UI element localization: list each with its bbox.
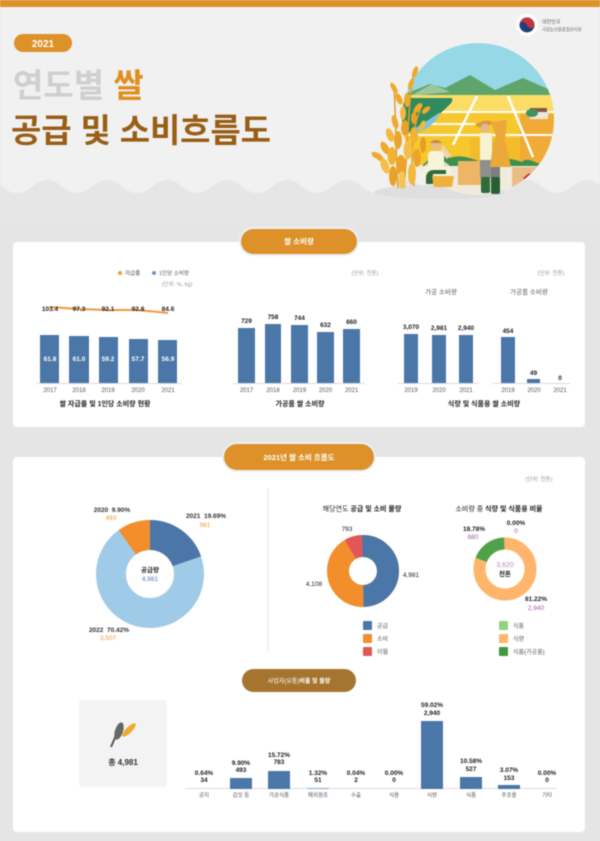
chart: processed food consumption: 729 — [241, 318, 252, 325]
legend: 식품 — [513, 622, 525, 630]
bar chart: use breakdown: 0.00% — [538, 770, 556, 777]
donut: supply by year: 981 — [200, 522, 211, 529]
chart: self-sufficiency and per-capita consumption: 2018 — [72, 388, 86, 394]
legend: 소비 — [377, 635, 388, 643]
donut: supply and consumption: 4,981 — [403, 572, 420, 579]
bar chart: use breakdown: 34 — [200, 777, 208, 784]
bar chart: use breakdown: 0.00% — [385, 770, 403, 777]
legend: (단위: %, kg) — [162, 280, 192, 288]
heading pill: rice consumption — [239, 227, 359, 256]
donut: supply and consumption — [306, 504, 420, 656]
chart: self-sufficiency and per-capita consumption — [36, 269, 192, 408]
chart: self-sufficiency and per-capita consumption: 쌀 자급률 및 1인당 소비량 현황 — [60, 399, 151, 408]
heading pill: 2021 flow: 2021년 쌀 소비 흐름도 — [263, 452, 335, 462]
legend — [363, 621, 389, 656]
chart: food and processed consumption: 454 — [503, 328, 514, 335]
bar chart: use breakdown: 0.64% — [195, 770, 213, 777]
chart: self-sufficiency and per-capita consumption: 92.1 — [102, 306, 115, 313]
heading pill: rice consumption: 쌀 소비량 — [284, 236, 314, 246]
chart: self-sufficiency and per-capita consumption: 56.9 — [162, 356, 175, 363]
title: 공급 및 소비흐름도 — [11, 112, 271, 149]
legend — [118, 269, 192, 288]
chart: self-sufficiency and per-capita consumption: 2019 — [101, 388, 115, 394]
card: total icon: 총 4,981 — [108, 757, 138, 767]
chart: self-sufficiency and per-capita consumption: 84.6 — [162, 306, 175, 313]
bar chart: use breakdown: 783 — [274, 759, 285, 766]
chart: processed food consumption: 744 — [294, 315, 305, 322]
donut: supply by year: 2022 70.42% — [89, 627, 129, 634]
bar chart: use breakdown: 가공식품 — [269, 791, 289, 799]
bar chart: use breakdown: 9.90% — [232, 760, 250, 767]
chart: processed food consumption: 2018 — [266, 388, 280, 394]
donut: food and processed share: 0 — [514, 528, 518, 535]
donut: supply and consumption: 4,108 — [306, 581, 323, 588]
donut: food and processed share: 0.00% — [507, 520, 525, 527]
panel: rice consumption — [13, 227, 585, 427]
card: total icon — [79, 700, 167, 787]
year badge — [14, 34, 72, 52]
bar chart: use breakdown: 주조용 — [501, 792, 517, 799]
bar chart: use breakdown: 해외원조 — [308, 791, 328, 799]
title — [11, 67, 271, 149]
bar chart: use breakdown: 공지 — [199, 791, 209, 799]
chart: food and processed consumption: 가공품 소비량 — [510, 287, 548, 296]
chart: processed food consumption: 2019 — [293, 388, 307, 394]
chart: food and processed consumption: 49 — [530, 370, 537, 377]
title: 연도별 쌀 — [13, 67, 144, 104]
chart: processed food consumption: 2020 — [319, 388, 333, 394]
logo: 대한민국 — [542, 18, 561, 26]
panel: 2021 rice flow — [13, 442, 585, 832]
bar chart: use breakdown: 수출 — [351, 791, 361, 799]
chart: self-sufficiency and per-capita consumption: 2021 — [161, 388, 175, 394]
legend — [499, 621, 545, 656]
legend: 공급 — [377, 623, 389, 630]
legend: 이월 — [377, 648, 388, 656]
bar chart: use breakdown — [185, 702, 557, 799]
bar chart: use breakdown: 감모 등 — [233, 792, 249, 799]
donut: food and processed share: 천톤 — [499, 569, 511, 578]
donut: food and processed share — [455, 504, 547, 656]
year badge: 2021 — [32, 39, 55, 50]
chart: food and processed consumption: 2020 — [432, 388, 446, 394]
rice stalks — [370, 66, 431, 189]
illustration: rice harvest — [370, 40, 560, 199]
chart: food and processed consumption: 2021 — [459, 388, 473, 394]
legend: 식품(가공품) — [513, 648, 545, 656]
donut: supply by year: 공급량 — [141, 565, 159, 574]
legend: 자급률 — [125, 269, 140, 277]
donut: supply by year: 2021 19.69% — [186, 513, 226, 520]
panel: 2021 rice flow: (단위: 천톤) — [526, 475, 553, 483]
donut: food and processed share: 18.78% — [463, 526, 485, 533]
chart: food and processed consumption: 2019 — [404, 388, 418, 394]
legend: 식량 — [513, 635, 525, 643]
chart: self-sufficiency and per-capita consumption: 61.8 — [44, 356, 57, 363]
bar chart: use breakdown: 1.32% — [309, 770, 327, 777]
bar chart: use breakdown: 0.04% — [347, 770, 365, 777]
donut: supply by year: 3,507 — [100, 635, 117, 642]
bar chart: use breakdown: 2,940 — [424, 710, 441, 717]
heading pill: 2021 flow — [222, 442, 376, 472]
header background — [0, 0, 600, 225]
chart: processed food consumption — [233, 269, 379, 408]
bar chart: use breakdown: 식품 — [466, 791, 476, 799]
bar chart: use breakdown: 527 — [466, 766, 477, 773]
chart: self-sufficiency and per-capita consumption: 103.4 — [42, 306, 59, 313]
bar chart: use breakdown: 0 — [545, 777, 549, 784]
chart: self-sufficiency and per-capita consumption: 92.8 — [132, 306, 145, 313]
chart: self-sufficiency and per-capita consumption: 2020 — [131, 388, 145, 394]
chart: food and processed consumption: 0 — [558, 375, 562, 382]
chart: food and processed consumption: 2,940 — [458, 325, 475, 332]
chart: food and processed consumption: 3,070 — [403, 324, 420, 331]
icon: rice ear — [111, 721, 137, 747]
logo: 국립농산물품질관리원 — [542, 26, 582, 33]
bar chart: use breakdown: 식량 — [427, 791, 437, 799]
bar chart: use breakdown: 3.07% — [500, 767, 518, 774]
legend: 1인당 소비량 — [159, 269, 189, 277]
bar chart: use breakdown: 10.58% — [460, 758, 482, 765]
donut: food and processed share: 2,940 — [528, 605, 545, 612]
donut: food and processed share: 소비량 중 식량 및 식품용 비율 — [455, 504, 543, 513]
chart: food and processed consumption: 식량 및 식품용 쌀 소비량 — [448, 399, 521, 408]
donut: food and processed share: 81.22% — [525, 596, 547, 603]
sub heading pill — [242, 669, 356, 692]
chart: self-sufficiency and per-capita consumption: 59.2 — [102, 356, 115, 363]
donut: supply by year: 2020 9.90% — [94, 507, 130, 514]
bar chart: use breakdown: 2 — [354, 777, 358, 784]
chart: food and processed consumption — [398, 269, 570, 408]
bar chart: use breakdown: 493 — [236, 767, 247, 774]
chart: self-sufficiency and per-capita consumption: 2017 — [43, 388, 57, 394]
bar chart: use breakdown: 51 — [314, 777, 322, 784]
bar chart: use breakdown: 15.72% — [268, 752, 290, 759]
chart: self-sufficiency and per-capita consumption: 97.3 — [73, 306, 86, 313]
chart: self-sufficiency and per-capita consumption: 61.0 — [73, 356, 86, 363]
chart: processed food consumption: 660 — [346, 319, 357, 326]
bar chart: use breakdown: 기타 — [542, 791, 552, 799]
chart: food and processed consumption: 가공 소비량 — [425, 287, 457, 296]
donut: food and processed share: 680 — [468, 534, 479, 541]
bar chart: use breakdown: 153 — [504, 775, 515, 782]
chart: self-sufficiency and per-capita consumption: 57.7 — [132, 356, 145, 363]
donut: supply and consumption: 해당연도 공급 및 소비 물량 — [323, 504, 402, 513]
chart: food and processed consumption: 2021 — [553, 388, 567, 394]
chart: food and processed consumption: 2019 — [501, 388, 515, 394]
chart: food and processed consumption: 2,981 — [431, 325, 448, 332]
chart: processed food consumption: 2017 — [240, 388, 254, 394]
logo — [516, 14, 582, 36]
bar chart: use breakdown: 식용 — [389, 791, 399, 799]
chart: food and processed consumption: (단위: 천톤) — [538, 269, 565, 277]
chart: processed food consumption: 2021 — [345, 388, 359, 394]
bar chart: use breakdown: 0 — [392, 777, 396, 784]
donut: food and processed share: 3,620 — [496, 562, 514, 569]
chart: food and processed consumption: 2020 — [527, 388, 541, 394]
donut: supply and consumption: 793 — [342, 526, 353, 533]
bar chart: use breakdown: 59.02% — [421, 702, 443, 709]
sub heading pill: 사업자(유통)비율 및 물량 — [268, 677, 331, 685]
donut: supply by year — [89, 507, 226, 642]
farmer kneeling — [422, 140, 454, 187]
donut: supply by year: 493 — [106, 515, 117, 522]
chart: processed food consumption: 가공품 쌀 소비량 — [276, 399, 325, 408]
chart: processed food consumption: 758 — [268, 314, 279, 321]
chart: processed food consumption: (단위: 천톤) — [352, 269, 379, 277]
donut: supply by year: 4,981 — [142, 576, 159, 583]
farmer standing — [476, 119, 511, 194]
chart: processed food consumption: 632 — [320, 322, 331, 329]
